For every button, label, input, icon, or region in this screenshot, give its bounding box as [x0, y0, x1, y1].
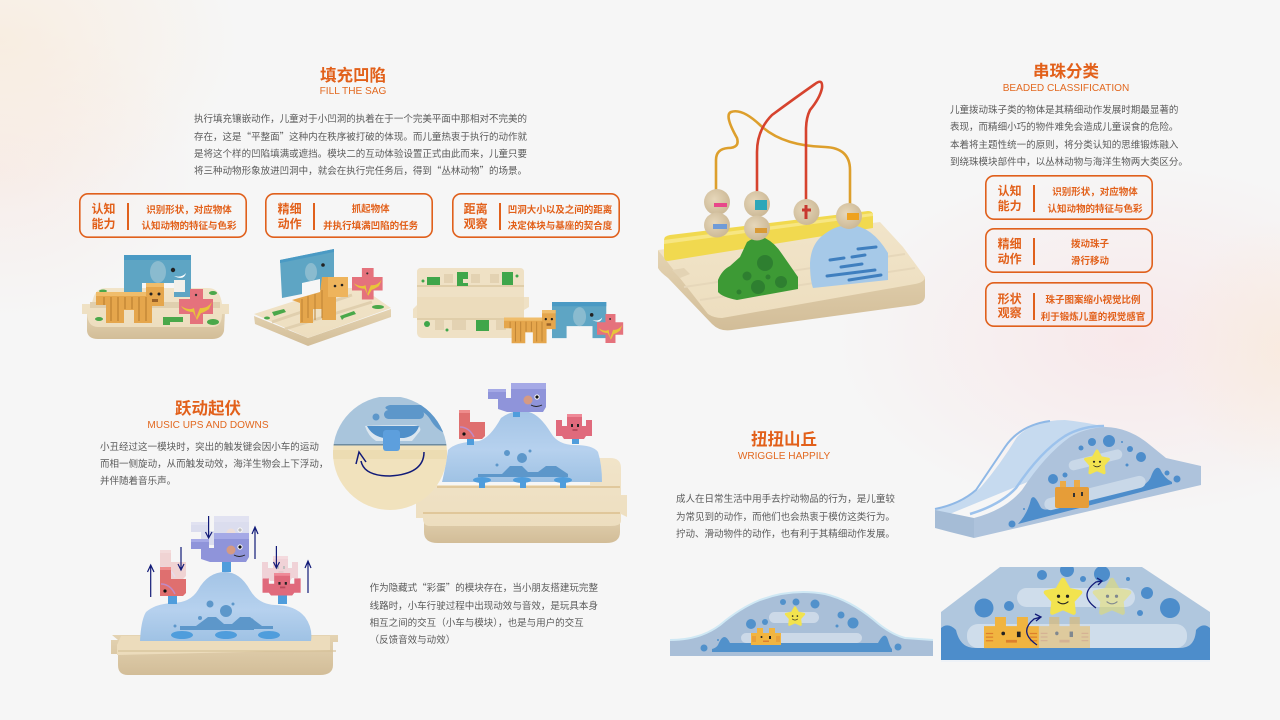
panel: beaded classification — [658, 58, 1188, 330]
callout: fine motor: 抓起物体 — [352, 201, 390, 215]
illustration: hill module perspective — [934, 420, 1201, 538]
callout: cognitive ability: 认知 — [91, 200, 116, 217]
callout: distance observation: 决定体块与基座的契合度 — [508, 218, 612, 232]
callout: distance observation — [452, 193, 620, 238]
callout: shape observation: 珠子图案缩小视觉比例 — [1045, 292, 1140, 306]
callout: fine motor: 拨动珠子 — [1071, 236, 1109, 250]
illustration: toy front view — [82, 255, 229, 339]
callout: fine motor: 滑行移动 — [1071, 253, 1109, 267]
subheading: fill the sag: FILL THE SAG — [320, 86, 386, 97]
text block: wriggle description: 成人在日常生活中用手去拧动物品的行为，是儿童较 — [676, 491, 895, 505]
illustration: magnified trigger detail — [333, 397, 447, 510]
callout: cognitive ability: 认知动物的特征与色彩 — [141, 218, 236, 232]
callout: cognitive ability: 识别形状，对应物体 — [146, 202, 232, 216]
illustration: hill module close-up with arrows — [941, 567, 1210, 660]
callout: distance observation: 距离 — [464, 200, 488, 217]
callout: cognitive ability — [985, 175, 1153, 220]
illustration: hill module front view — [670, 591, 933, 656]
callout: cognitive ability: 能力 — [91, 215, 116, 232]
callout: shape observation — [985, 282, 1153, 327]
text block: beaded description: 表现，而精细小巧的物件难免会造成儿童误食的危险。 — [950, 119, 1178, 133]
callout: fine motor: 并执行填满凹陷的任务 — [323, 218, 418, 232]
panel: fill the sag — [79, 62, 624, 346]
text block: fill the sag description: 是将这个样的凹陷填满或遮挡。模块二的互动体验设置正式由此而来，儿童只要 — [194, 146, 527, 160]
callout: cognitive ability — [79, 193, 247, 238]
text block: fill the sag description: 将三种动物形象放进凹洞中，就会在执行完任务后，得到“丛林动物”的场景。 — [194, 163, 527, 177]
text block: wriggle description: 为常见到的动作，而他们也会热衷于模仿这类行为。 — [676, 508, 895, 522]
heading: 跃动起伏: 跃动起伏 — [175, 395, 241, 419]
text block: fill the sag description: 执行填充镶嵌动作，儿童对于小凹洞的执着在于一个完美平面中那相对不完美的 — [194, 111, 527, 125]
text block: fill the sag description — [194, 111, 527, 177]
text block: beaded description: 儿童拨动珠子类的物体是其精细动作发展时期最显著的 — [950, 102, 1178, 116]
illustration: bead maze toy — [658, 80, 925, 330]
text block: wriggle description — [676, 491, 895, 540]
illustration: toy angled view — [254, 249, 391, 346]
callout: shape observation: 观察 — [998, 304, 1022, 321]
callout: shape observation: 利于锻炼儿童的视觉感官 — [1041, 309, 1145, 323]
callout: cognitive ability: 识别形状，对应物体 — [1052, 184, 1138, 198]
text block: easter egg description: 作为隐藏式“彩蛋”的模块存在，当小朋友搭建玩完整 — [370, 580, 598, 594]
text block: music description — [100, 439, 328, 487]
text block: easter egg description: 相互之间的交互（小车与模块），也是与用户的交互 — [370, 615, 584, 629]
callout: fine motor: 精细 — [998, 235, 1022, 252]
callout: cognitive ability: 认知 — [998, 182, 1022, 199]
callout: distance observation: 观察 — [464, 215, 488, 232]
callout: fine motor: 动作 — [998, 250, 1022, 267]
callout: fine motor: 动作 — [278, 215, 302, 232]
text block: fill the sag description: 存在，这是“平整面”这种内在秩序被打破的体现。而儿童热衷于执行的动作就 — [194, 128, 527, 142]
text block: easter egg description — [370, 580, 598, 646]
heading: 填充凹陷: 填充凹陷 — [320, 62, 386, 86]
callout: cognitive ability: 能力 — [998, 197, 1022, 214]
panel: wriggle happily — [670, 420, 1210, 660]
text block: beaded description — [950, 102, 1188, 168]
text block: music description: 而相一侧旋动，从而触发动效，海洋生物会上下浮动， — [100, 456, 328, 470]
text block: music description: 并伴随着音乐声。 — [100, 473, 176, 487]
callout: fine motor: 精细 — [278, 200, 302, 217]
text block: music description: 小丑经过这一模块时，突出的触发键会因小车的运动 — [100, 439, 319, 453]
subheading: wriggle happily: WRIGGLE HAPPILY — [738, 450, 830, 462]
callout: fine motor — [265, 193, 433, 238]
illustration: wave module perspective — [416, 383, 627, 543]
illustration: toy flat view with pieces — [413, 268, 624, 344]
callout: cognitive ability: 认知动物的特征与色彩 — [1047, 201, 1142, 215]
callout: shape observation: 形状 — [998, 290, 1022, 307]
illustration: wave module front view with arrows — [111, 516, 338, 675]
callout: fine motor — [985, 228, 1153, 273]
subheading: music ups and downs: MUSIC UPS AND DOWNS — [147, 420, 269, 430]
panel: music ups and downs — [100, 383, 627, 675]
text block: beaded description: 本着将主题性统一的原则，将分类认知的思维锻炼融入 — [950, 136, 1178, 150]
text block: wriggle description: 拧动、滑动物件的动作，也有利于其精细动作发展。 — [676, 526, 895, 540]
text block: easter egg description: （反馈音效与动效） — [370, 632, 455, 646]
text block: easter egg description: 线路时，小车行驶过程中出现动效与音效，是玩具本身 — [370, 598, 598, 612]
callout: distance observation: 凹洞大小以及之间的距离 — [508, 202, 612, 216]
subheading: beaded classification: BEADED CLASSIFICATION — [1003, 82, 1129, 94]
heading: 串珠分类: 串珠分类 — [1033, 58, 1099, 82]
heading: 扭扭山丘: 扭扭山丘 — [751, 426, 817, 450]
text block: beaded description: 到绕珠模块部件中，以丛林动物与海洋生物两大类区分。 — [950, 154, 1188, 168]
